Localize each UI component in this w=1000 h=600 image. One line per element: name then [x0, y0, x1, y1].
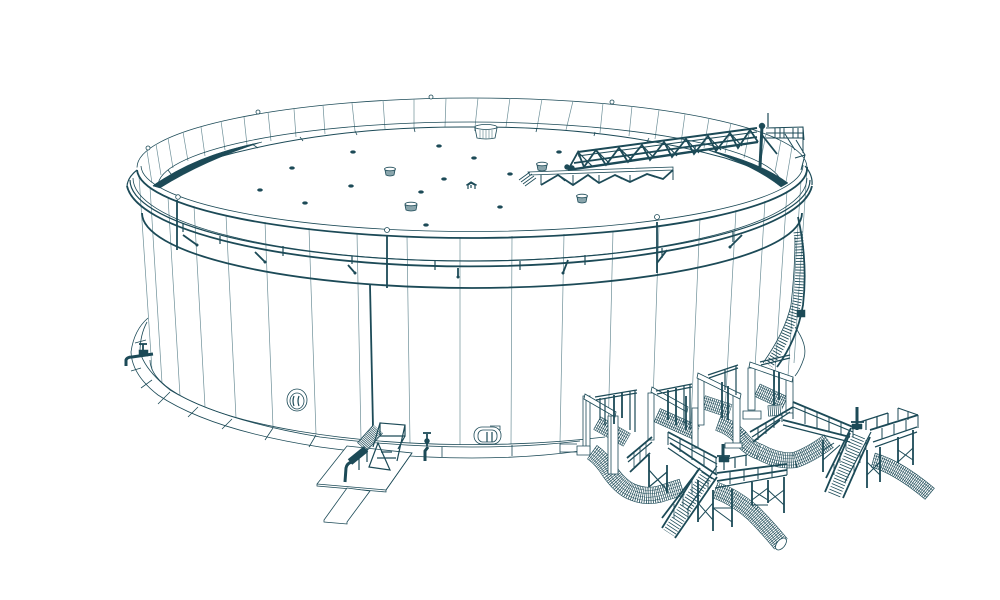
roof hatches large — [384, 124, 588, 211]
roof vents small — [257, 145, 562, 226]
floating roof deck edge — [153, 122, 788, 188]
spiral stair on tank side — [763, 217, 805, 367]
lower stiffening ring — [142, 213, 802, 288]
stair to second platform — [750, 407, 793, 442]
vertical guide pipes and rim knobs — [146, 95, 660, 427]
shell manhole left — [287, 389, 307, 411]
rolling ladder truss — [564, 128, 758, 170]
main pipes — [592, 390, 930, 552]
gate frame 2 — [648, 384, 698, 448]
outer top rim — [127, 165, 812, 238]
rear stair — [825, 428, 871, 498]
truss support mast and top platform — [759, 113, 805, 170]
foundation ring — [131, 318, 805, 458]
stair between gates 1 and 2 — [627, 437, 667, 493]
left nozzle and valve — [126, 344, 153, 366]
tank base outline — [150, 360, 605, 445]
front pipe platform — [668, 432, 787, 531]
tank shell wall seams — [139, 170, 807, 445]
small pipe ramp — [345, 423, 405, 482]
rear pipe platform — [783, 402, 918, 488]
gate frame 3 — [697, 365, 742, 448]
gate frame 4 — [743, 355, 793, 419]
roof small hut — [466, 182, 477, 189]
ring brackets — [183, 235, 742, 278]
upper back rim and inner wall seams — [137, 98, 807, 183]
gate frame 1 — [560, 390, 637, 474]
roof walkway platform — [519, 167, 673, 186]
front right valve — [423, 433, 431, 461]
front bottom platform — [317, 446, 412, 524]
front stair — [662, 466, 717, 538]
shell manhole right — [474, 426, 501, 444]
walkway ring — [127, 178, 812, 270]
